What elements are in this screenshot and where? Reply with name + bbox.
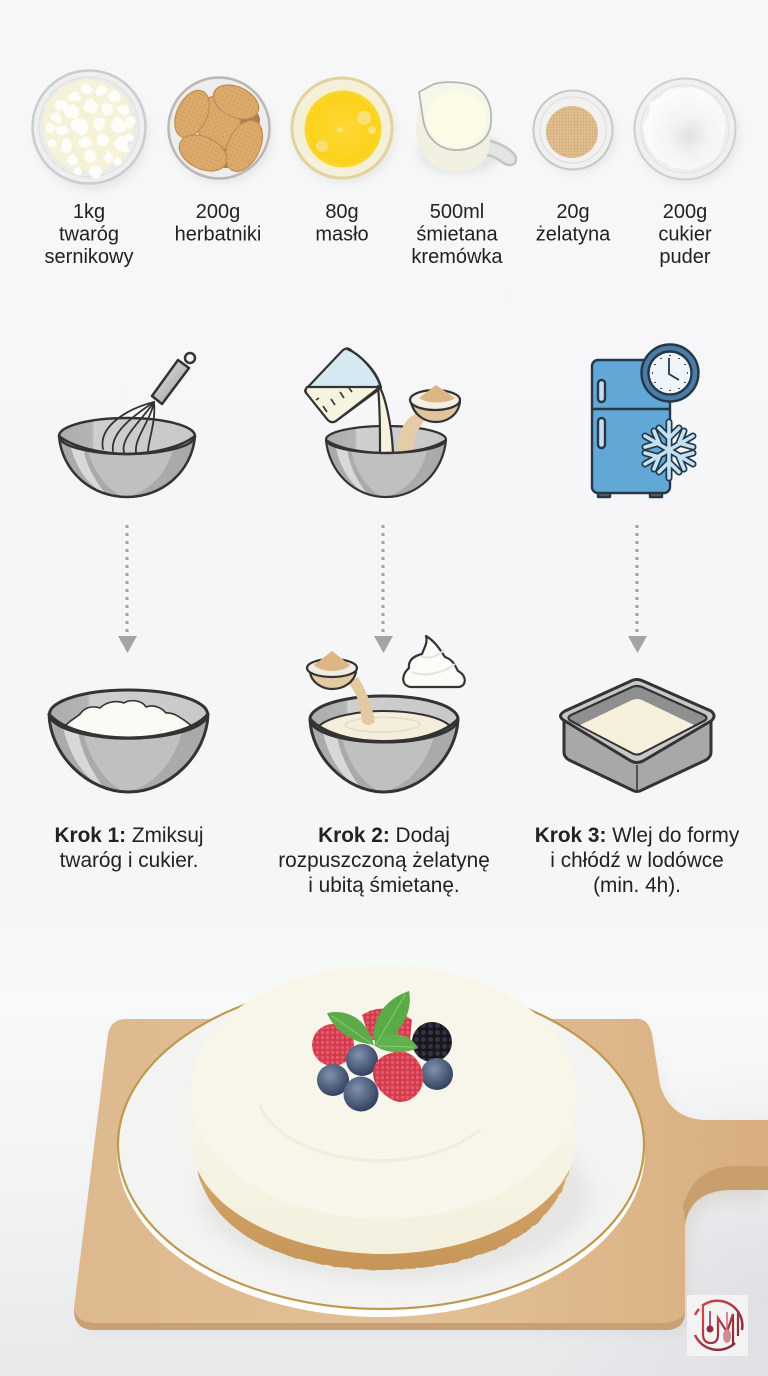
- label: śmietana: kremówka: [411, 246, 503, 268]
- caption: step 1: Krok 1: Zmiksuj: [54, 824, 204, 847]
- snowflake: [645, 422, 693, 478]
- arrow: step 1: [118, 525, 137, 653]
- fridge body: [592, 360, 670, 493]
- caption: step 3: Krok 3: Wlej do formy: [535, 824, 739, 847]
- ingredient: cukier puder bowl: [634, 78, 739, 184]
- label: śmietana: śmietana: [416, 224, 498, 246]
- label: herbatniki: herbatniki: [175, 224, 261, 246]
- label: cukier puder: puder: [659, 246, 711, 268]
- raspberries: [362, 1009, 412, 1040]
- ingredient: żelatyna bowl: [534, 90, 616, 173]
- milk stream: [378, 386, 393, 453]
- label: masło: masło: [315, 224, 369, 246]
- white plate with gold rim: [117, 981, 645, 1317]
- ingredient: twaróg sernikowy bowl: [32, 70, 148, 190]
- step 2 top icon: pouring into bowl: [305, 348, 460, 497]
- ingredient: masło bowl: [292, 78, 396, 183]
- caption: step 2: Krok 2: Dodaj: [318, 824, 450, 847]
- label: cukier puder: 200g: [663, 201, 707, 223]
- whipped cream: [403, 636, 465, 687]
- berries and mint: [312, 991, 453, 1112]
- caption: step 2: rozpuszczoną żelatynę: [278, 849, 490, 872]
- caption: step 1: twaróg i cukier.: [60, 849, 198, 872]
- blackberry: [412, 1022, 452, 1062]
- finished cheesecake photo: [74, 965, 768, 1330]
- arrow: step 2: [374, 525, 393, 653]
- label: twaróg: twaróg: [59, 224, 119, 246]
- gelatin bowl: [307, 651, 357, 689]
- fridge feet: [598, 491, 662, 497]
- raspberry front: [373, 1051, 423, 1102]
- ingredient: śmietana jug: [416, 82, 516, 174]
- label: cukier puder: cukier: [658, 224, 712, 246]
- logo badge: [687, 1295, 748, 1356]
- caption: step 3: (min. 4h).: [593, 874, 681, 897]
- measuring jug: [305, 348, 381, 422]
- label: masło: 80g: [325, 201, 359, 223]
- step 2 bottom icon: bowl with cream: [307, 636, 465, 792]
- gelatin stream: [397, 412, 430, 452]
- label: twaróg: sernikowy: [45, 246, 133, 268]
- label: herbatniki: 200g: [196, 201, 240, 223]
- label: śmietana: 500ml: [430, 201, 484, 223]
- bowl front rim: [326, 440, 446, 497]
- gelatin stream: [348, 677, 375, 725]
- mint: [327, 1012, 374, 1045]
- step 1 bottom icon: bowl with cheese: [49, 690, 208, 792]
- label: twaróg: 1kg: [73, 201, 105, 223]
- ingredient labels: [45, 201, 712, 268]
- label: żelatyna: żelatyna: [536, 224, 611, 246]
- ingredients row: [32, 70, 739, 268]
- cheesecake: [190, 965, 576, 1270]
- arrow: step 3: [628, 525, 647, 653]
- label: żelatyna: 20g: [556, 201, 590, 223]
- bowl: [310, 696, 458, 792]
- ingredient: herbatniki bowl: [168, 78, 273, 183]
- step 1 top icon: whisk in bowl: [59, 353, 195, 497]
- clock: [642, 344, 698, 402]
- wooden board with handle: [74, 1019, 768, 1330]
- bowl: [326, 426, 446, 497]
- gelatin bowl: [410, 385, 460, 422]
- blueberries: [346, 1044, 378, 1076]
- step 3 top icon: fridge: [592, 344, 698, 497]
- caption: step 3: i chłódź w lodówce: [550, 849, 724, 872]
- step 3 bottom icon: cake tin: [560, 680, 714, 792]
- caption: step 2: i ubitą śmietanę.: [308, 874, 460, 897]
- step captions: [54, 824, 740, 897]
